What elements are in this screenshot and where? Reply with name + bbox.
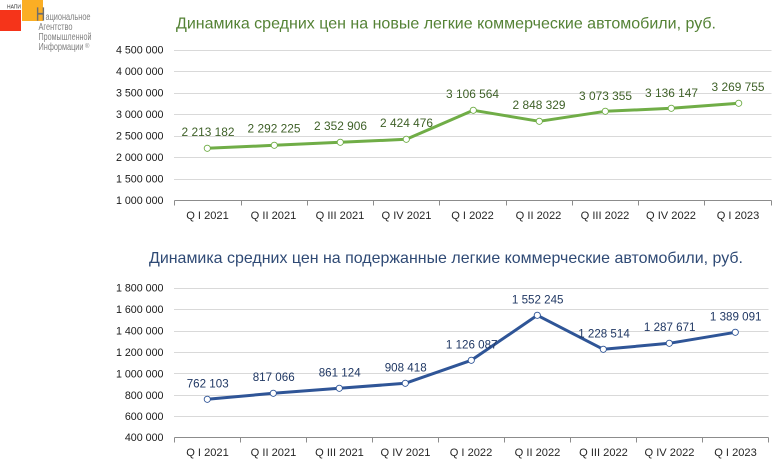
data labels: used vehicle prices: 1 389 091 [710,310,761,323]
x axis with quarter labels: Q IV 2022 [646,210,696,222]
x axis with quarter labels: Q IV 2021 [381,447,430,459]
logo: Национальное Агентство Промышленной Информации: Информации [38,41,84,53]
data labels: new vehicle prices: 2 424 476 [380,116,433,130]
data labels: used vehicle prices: 1 126 087 [446,338,497,351]
x axis with quarter labels: Q I 2022 [451,210,494,222]
data labels: new vehicle prices [182,80,765,139]
y axis labels and grid lines: 1 500 000 [116,174,164,186]
y axis labels and grid lines: 3 000 000 [116,109,164,121]
x axis with quarter labels: Q III 2021 [315,447,364,459]
x axis with quarter labels [174,438,768,459]
y axis labels and grid lines: 400 000 [125,432,164,444]
x axis with quarter labels: Q I 2021 [186,447,229,459]
logo: Национальное Агентство Промышленной Информации: Агентство [38,21,73,33]
data labels: used vehicle prices: 908 418 [385,361,427,374]
x axis with quarter labels: Q II 2021 [251,447,296,459]
data labels: new vehicle prices: 3 106 564 [446,87,499,101]
y axis labels and grid lines: 2 500 000 [116,130,164,142]
y axis labels and grid lines [116,282,768,444]
x axis with quarter labels [174,200,772,222]
line series: new vehicle prices [204,100,742,151]
data labels: new vehicle prices: 2 213 182 [182,125,235,139]
y axis labels and grid lines: 2 000 000 [116,152,164,164]
x axis with quarter labels: Q III 2022 [579,447,628,459]
y axis labels and grid lines: 1 200 000 [116,347,164,359]
y axis labels and grid lines: 1 400 000 [116,326,164,338]
y axis labels and grid lines [116,44,772,207]
x axis with quarter labels: Q II 2022 [516,210,561,222]
data labels: used vehicle prices: 817 066 [253,371,295,384]
logo: Национальное Агентство Промышленной Информации: НАПИ [7,4,21,10]
x axis with quarter labels: Q III 2021 [316,210,364,222]
x axis with quarter labels: Q III 2022 [581,210,629,222]
y axis labels and grid lines: 800 000 [125,390,164,402]
logo: Национальное Агентство Промышленной Информации: Промышленной [38,31,92,43]
x axis with quarter labels: Q IV 2022 [645,447,694,459]
line series: used vehicle prices [204,312,738,402]
y axis labels and grid lines: 1 000 000 [116,368,164,380]
data labels: used vehicle prices: 861 124 [319,366,361,379]
data labels: used vehicle prices [187,293,761,390]
data labels: used vehicle prices: 1 287 671 [644,321,695,334]
chart: used light commercial vehicles [116,250,768,459]
y axis labels and grid lines: 1 600 000 [116,304,164,316]
heading: used vehicles chart title: Динамика средних цен на подержанные легкие коммерческие автомобили, руб. [149,250,743,267]
data labels: used vehicle prices: 1 552 245 [512,293,563,306]
x axis with quarter labels: Q I 2021 [186,210,229,222]
data labels: new vehicle prices: 3 269 755 [712,80,765,94]
heading: new vehicles chart title: Динамика средних цен на новые легкие коммерческие автомобили, руб. [176,16,716,32]
logo: Национальное Агентство Промышленной Информации: ® [85,43,90,50]
x axis with quarter labels: Q I 2022 [450,447,492,459]
y axis labels and grid lines: 1 000 000 [116,195,164,207]
y axis labels and grid lines: 3 500 000 [116,88,164,100]
y axis labels and grid lines: 4 500 000 [116,44,164,56]
y axis labels and grid lines: 600 000 [125,411,164,423]
x axis with quarter labels: Q II 2022 [515,447,560,459]
y axis labels and grid lines: 4 000 000 [116,66,164,78]
data labels: new vehicle prices: 2 352 906 [314,119,367,133]
data labels: new vehicle prices: 3 073 355 [579,89,632,103]
y axis labels and grid lines: 1 800 000 [116,282,164,294]
data labels: new vehicle prices: 2 848 329 [513,98,566,112]
data labels: new vehicle prices: 3 136 147 [645,86,698,100]
data labels: used vehicle prices: 1 228 514 [578,327,630,340]
logo: Национальное Агентство Промышленной Информации: ациональное [46,11,91,23]
data labels: used vehicle prices: 762 103 [187,377,229,390]
x axis with quarter labels: Q IV 2021 [382,210,431,222]
chart: new light commercial vehicles [116,16,772,222]
logo: Национальное Агентство Промышленной Информации: Н [36,4,45,24]
data labels: new vehicle prices: 2 292 225 [248,122,301,136]
x axis with quarter labels: Q I 2023 [714,447,757,459]
x axis with quarter labels: Q II 2021 [251,210,296,222]
logo: Национальное Агентство Промышленной Информации [0,0,92,53]
x axis with quarter labels: Q I 2023 [717,210,759,222]
